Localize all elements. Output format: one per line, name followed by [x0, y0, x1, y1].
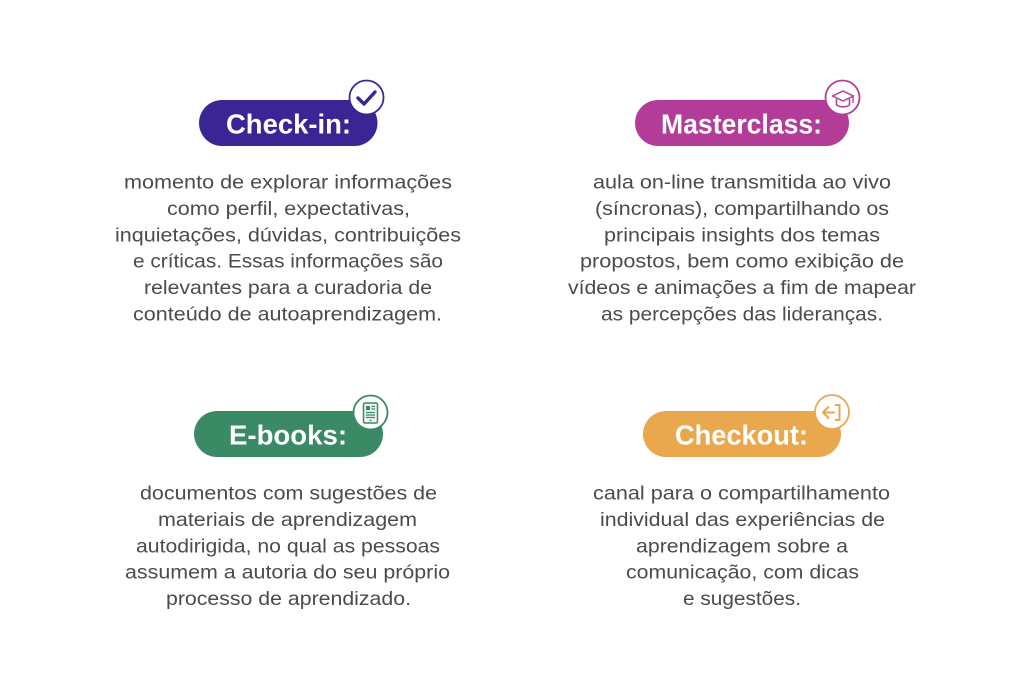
- panel: checkout: [593, 395, 890, 610]
- text block: e-books description: [125, 482, 450, 610]
- text block: masterclass description: as percepções das lideranças.: [601, 304, 883, 326]
- text block: masterclass description: propostos, bem como exibição de: [580, 250, 904, 272]
- text block: check-in description: inquietações, dúvidas, contribuições: [115, 224, 461, 246]
- text block: masterclass description: [568, 172, 917, 326]
- panel: e-books: [125, 396, 450, 610]
- heading pill: e-books: [194, 411, 383, 457]
- text block: checkout description: comunicação, com dicas: [626, 562, 859, 584]
- panel: check-in: [115, 80, 461, 326]
- text block: checkout description: e sugestões.: [683, 588, 801, 610]
- icon: exit arrow: [815, 395, 849, 429]
- text block: check-in description: como perfil, expectativas,: [167, 198, 410, 220]
- text block: check-in description: conteúdo de autoaprendizagem.: [133, 304, 442, 326]
- icon: graduation cap: [826, 80, 860, 114]
- text block: masterclass description: principais insights dos temas: [604, 224, 880, 246]
- text block: masterclass description: vídeos e animações a fim de mapear: [568, 277, 917, 299]
- panel: masterclass: [568, 80, 917, 326]
- text block: masterclass description: (síncronas), compartilhando os: [595, 198, 889, 220]
- text block: check-in description: relevantes para a curadoria de: [144, 277, 432, 299]
- text block: check-in description: momento de explorar informações: [124, 172, 452, 194]
- text block: checkout description: individual das experiências de: [600, 509, 885, 531]
- text block: masterclass description: aula on-line transmitida ao vivo: [593, 172, 891, 194]
- heading pill: e-books: E-books:: [229, 420, 347, 450]
- icon: check mark: [350, 80, 384, 114]
- heading pill: check-in: [199, 100, 378, 146]
- heading pill: masterclass: [635, 100, 849, 146]
- text block: checkout description: aprendizagem sobre a: [636, 536, 848, 558]
- text block: e-books description: processo de aprendizado.: [166, 588, 411, 610]
- text block: checkout description: canal para o compartilhamento: [593, 482, 890, 504]
- heading pill: masterclass: Masterclass:: [661, 108, 822, 140]
- text block: check-in description: [115, 172, 461, 326]
- text block: e-books description: materiais de aprendizagem: [158, 509, 417, 531]
- text block: e-books description: autodirigida, no qual as pessoas: [136, 536, 440, 558]
- heading pill: checkout: Checkout:: [675, 420, 808, 450]
- text block: checkout description: [593, 482, 890, 610]
- icon: e-reader tablet: [354, 396, 388, 430]
- text block: e-books description: assumem a autoria do seu próprio: [125, 562, 450, 584]
- text block: e-books description: documentos com sugestões de: [140, 482, 437, 504]
- heading pill: check-in: Check-in:: [226, 108, 351, 140]
- text block: check-in description: e críticas. Essas informações são: [133, 250, 443, 272]
- heading pill: checkout: [643, 411, 841, 457]
